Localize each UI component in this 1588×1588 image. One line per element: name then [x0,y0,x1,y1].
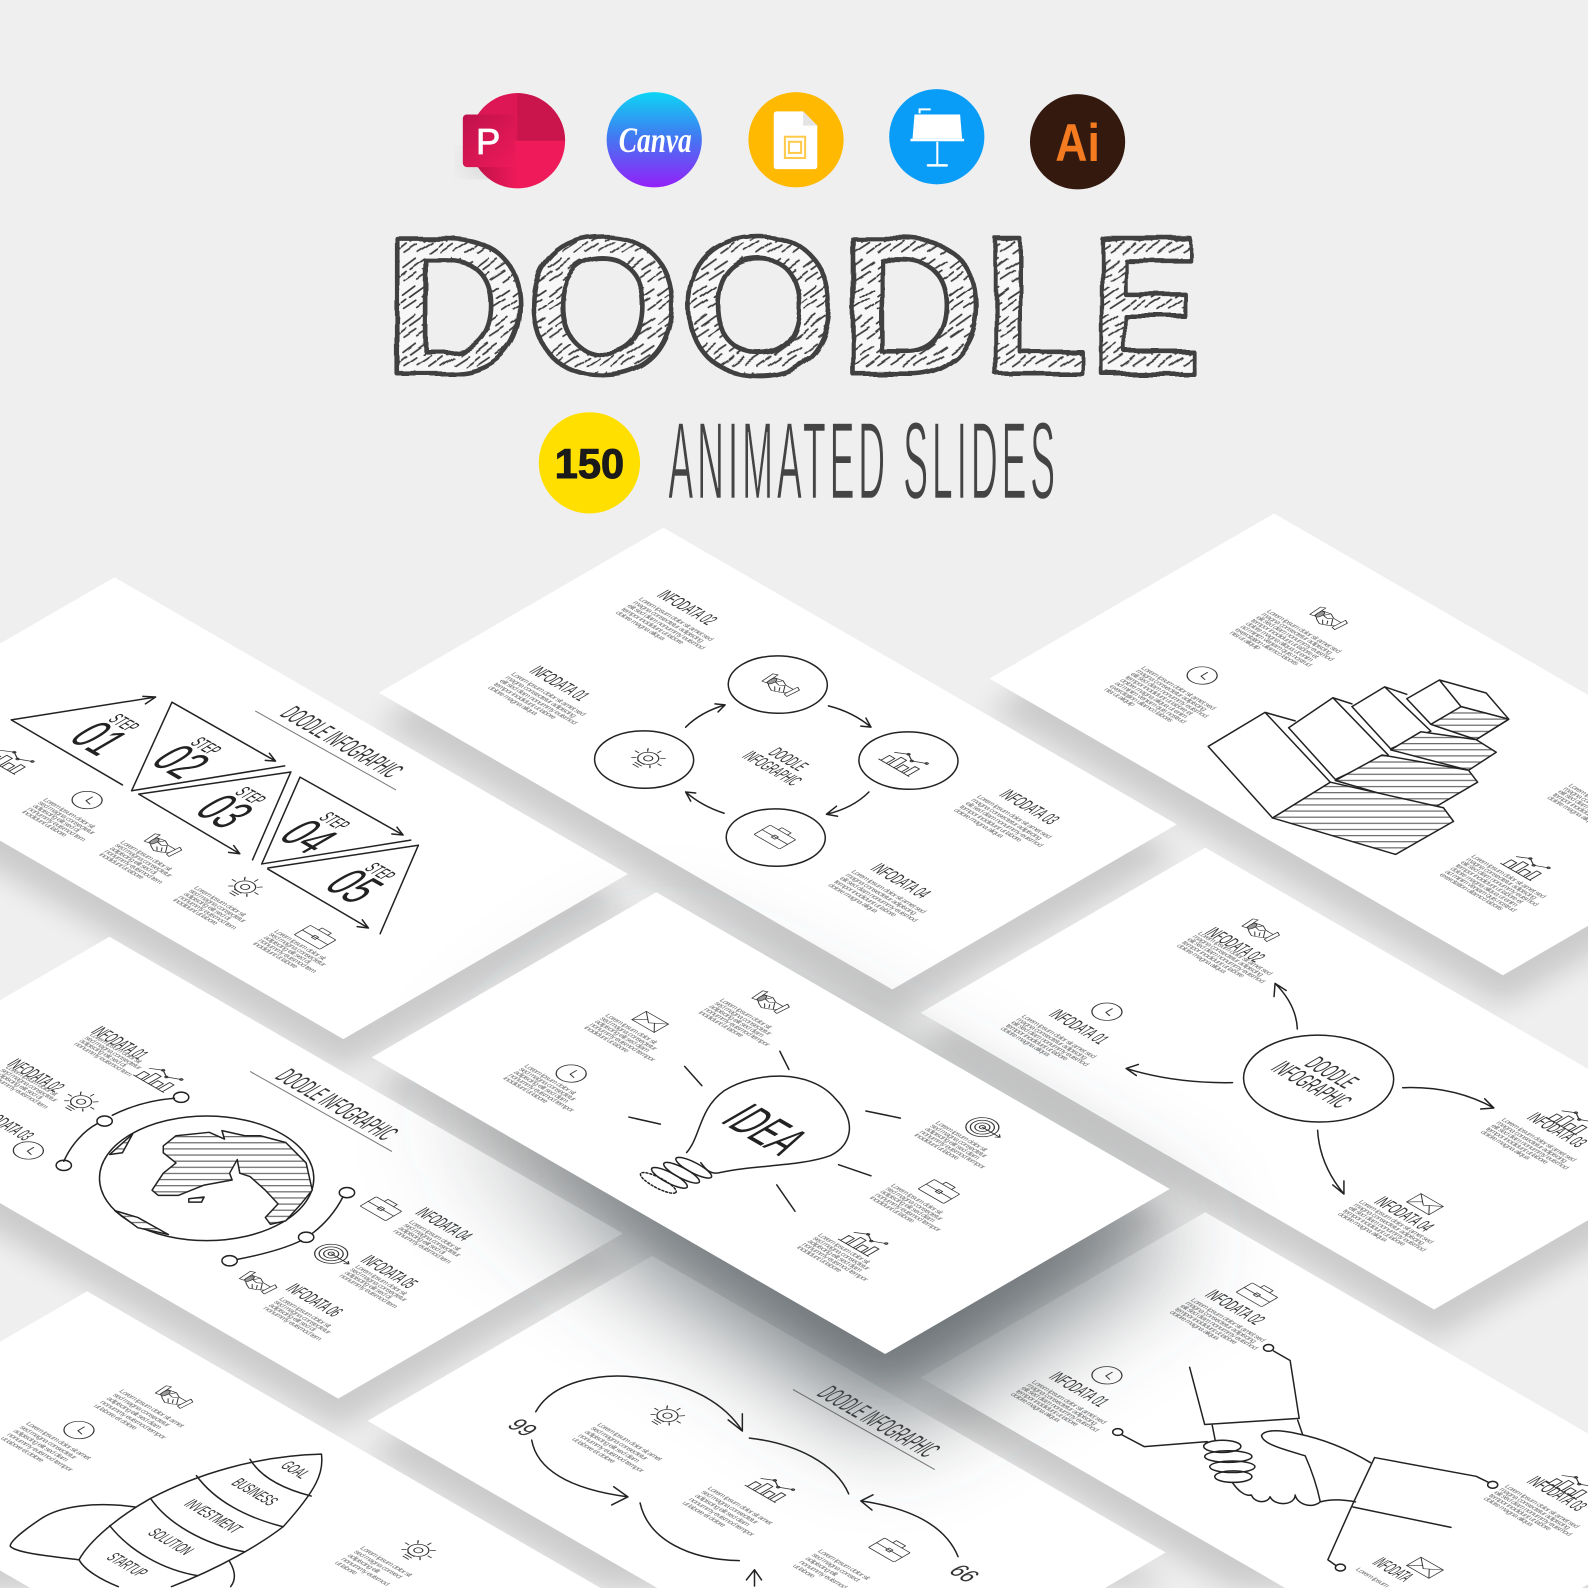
step labels: 01 [57,714,142,763]
heavy shadow of center slide [372,933,1190,1430]
text block: nonummy euismod tempor [800,1241,871,1283]
text block: dolore magna aliqua [826,882,882,914]
text block: magna consectetur adipiscing [843,872,920,916]
step labels: 05 [312,861,397,911]
panel: loop slide [368,1256,1166,1588]
cycle center label: INFOGRAPHIC [737,749,807,789]
icon: bulb [56,1087,107,1116]
text block: adipiscing elit sed diam [707,1003,767,1038]
title: DOODLE [384,196,1200,416]
rocket labels [102,1458,315,1580]
text block: adipiscing elit sed di [342,1270,395,1300]
hub label [1264,1053,1366,1112]
rocket labels: GOAL [276,1458,315,1481]
text block: exercitation ullamco laboris [1107,683,1176,723]
text block: sed magna consectetur [266,931,329,968]
stacked cube diagram [1208,680,1509,854]
text block: ut labore [333,1560,360,1576]
icon: Canva [607,92,702,187]
rocket labels: SOLUTION [143,1525,199,1557]
title: DOODLE: O [526,196,681,416]
text block: Lorem ipsum dolor sit amet sed [1139,665,1219,711]
panel: rocket slide [0,1291,601,1588]
text block: ut labore et dolore [680,1500,729,1528]
text block: tempor incididunt ut labore et [1248,617,1322,660]
icon: Canva: Canva [619,120,692,160]
text block: adipiscing elit sed di [261,934,314,965]
icon: clock [1086,1363,1128,1388]
text block: nisi ut aliquip [1227,630,1264,651]
text block: nonummy euismod tempor [873,1192,944,1233]
text block: sed magna consectetur [712,1000,775,1037]
text block: Lorem ipsum dolor sit amet [705,1485,775,1526]
text block: ad minim veniam quis nostrud [1112,680,1189,725]
text block: nonummy euismod tem [256,937,320,974]
text block: magna consectetur adipiscing [1351,1202,1428,1246]
text block: tempor incididunt ut labore [1483,1126,1551,1165]
text block: nonummy euismod tempor [686,1496,758,1538]
text block: Lorem ipsum dolor sit [87,1032,145,1065]
icon: clock [7,1138,50,1163]
text block: sed magna consectetur [517,1066,580,1102]
text block: tempor incididunt ut labore [1003,1022,1071,1062]
heading: INFODATA 02 [1199,925,1270,965]
text block: adipiscing elit sed diam [582,1429,642,1464]
text block: incididunt ut labore [582,1025,632,1054]
panel: loop slide: DOODLE INFOGRAPHIC [810,1382,947,1462]
text block: Lorem ipsum dolor sit amet [117,1388,187,1429]
text block: Lorem ipsum dolor sit amet sed [1195,930,1275,976]
heading: INFODATA 02 [2,1056,69,1095]
text block: magna consectetur adipiscing [503,674,579,719]
icon: clock [1181,663,1223,688]
text block: elit sed diam nonummy euismod [963,800,1046,848]
icon: mail [1407,1557,1443,1578]
text block: Lorem ipsum dolor sit amet sed [1356,1199,1436,1245]
text block: Lorem ipsum dolor sit amet sed [1019,1013,1099,1060]
icon: mail [632,1011,668,1032]
panel: triangle steps slide: DOODLE INFOGRAPHIC [273,703,410,782]
icon: briefcase [360,1195,405,1221]
text block: dolore magna aliqua [1008,1391,1064,1424]
step labels: STEP [314,809,355,833]
text block: Lorem ipsum dolor sit [272,928,329,961]
text block: incididunt ut labore [171,897,221,926]
text block: incididunt ut labore [20,809,70,838]
text block: incididunt ut labore [696,1009,747,1038]
heading: INFODATA 02 [1199,1287,1270,1328]
app icons row [463,89,1125,189]
text block: elit sed diam nonummy euismod [1019,1385,1102,1433]
text block: dolore magna aliqua [998,1026,1054,1058]
icon: chart [745,1473,796,1503]
step labels [57,711,400,911]
icon: chart [838,1227,889,1256]
text block: elit sed diam nonummy euismod [497,678,580,726]
text block: elit sed diam nonummy euismod [1254,614,1337,662]
icon: briefcase [294,923,339,949]
text block: Lorem ipsum dolor sit amet sed [1502,1483,1582,1529]
heading: INFODATA 04 [1369,1194,1439,1235]
text block: dolore magna aliqua [1335,1211,1391,1243]
handshake diagram [1113,1344,1498,1571]
text block: sed magna consect [809,1552,863,1583]
text block: elit sed diam nonummy euismod [625,603,708,651]
text block: Lorem ipsum dolor sit [277,1296,334,1329]
heading: INFODATA 04 [410,1205,477,1244]
text block: magna consectetur adipiscing [1133,668,1210,712]
icon: Keynote [889,89,984,184]
text block: adipiscing elit sed di [107,845,160,876]
text block: adipiscing elit sed diam [11,1428,71,1463]
icon: Illustrator [1030,94,1125,189]
text block: dolore magna aliqua ut enim [1243,620,1316,663]
text block: nonummy euismod tem [391,1228,454,1265]
text block: ad minim veniam quis nostrud [1442,869,1519,913]
text block: adipiscing elit [345,1552,383,1574]
text block: sed magna consect [351,1549,405,1580]
text block: sed magna consectetur [82,1035,145,1071]
text block: magna consectetur adipiscing [1014,1016,1090,1061]
step labels: 02 [139,737,224,786]
panel: globe slide: DOODLE INFOGRAPHIC [268,1065,405,1145]
subtitle: ANIMATED SLIDES [668,401,1055,522]
heading: INFODATA 01 [1043,1369,1114,1410]
icon: briefcase [869,1536,914,1562]
text block: incididunt ut labore [795,1244,845,1273]
text block: nonummy euismod tem [337,1273,401,1309]
step labels: STEP [185,734,226,758]
text block: incididunt ut labore [867,1195,918,1224]
cycle numbers: 66 [502,1415,545,1439]
icon: clock [550,1061,592,1086]
icon: clock [66,788,108,812]
text block: dolore magna aliqua [486,684,542,717]
icon: Illustrator: Ai [1055,114,1100,173]
text block: ut labore et dolore [91,1403,140,1431]
icon: bulb [393,1536,444,1565]
text block: nonummy euismod tempor [98,1399,169,1440]
icon: clock [1086,999,1128,1024]
hub diagram [1126,983,1494,1194]
text block: Lorem ipsum dolor sit amet sed [1188,1297,1268,1343]
text block: sed magna consectetur [598,1015,661,1052]
icon: handshake [758,673,802,698]
step labels: 04 [266,812,351,861]
text block: Lorem ipsum dolor sit [816,1232,873,1265]
text block: incididunt ut labore [251,940,301,970]
text block: exercitation ullamco laboris [1233,627,1302,667]
soft slide shadows [0,544,1588,1588]
text block: ut labore [790,1563,818,1579]
text block: tempor incididunt ut labore [1341,1208,1408,1247]
icon: briefcase [754,823,799,849]
text block: Lorem ipsum dolor sit [353,1263,410,1296]
title: DOODLE: D [840,196,984,416]
text block: incididunt ut labore [912,1132,962,1161]
text block: tempor incididunt ut labore [1172,1306,1240,1345]
icon: handshake [151,1385,195,1410]
text block: dolore magna aliqua [1167,1309,1223,1341]
text block: Lorem ipsum dolor sit amet sed [975,794,1055,840]
text block: tempor incididunt ut labore et [1453,862,1526,905]
bulb diagram [629,1051,900,1211]
icon: bulb [220,872,271,902]
icon: mail [1407,1194,1443,1215]
text block: sed magna consectetur [810,1235,873,1272]
step labels: STEP [359,860,400,884]
text block: Lorem ipsum dolor sit [406,1219,464,1252]
heading: INFODATA 03 [994,787,1064,828]
text block: Lorem ipsum dolor sit amet [595,1421,665,1462]
text block: adipiscing elit sed diam [104,1395,164,1430]
panel: idea bulb slide [372,892,1170,1354]
heading: INFODATA 06 [280,1281,347,1320]
text block: Lorem ipsum dolor sit [888,1182,946,1215]
text block: tempor incididunt ut labore [619,606,687,645]
text block: elit sed diam nonummy euismod [837,875,920,923]
hub label: DOODLE [1298,1053,1366,1092]
cycle diagram [574,644,978,878]
text block: adipiscing elit [803,1555,841,1577]
text block: sed magna consectetur [36,800,99,836]
heading: INFODATA 04 [865,861,935,901]
text block: adipiscing elit sed di [266,1302,319,1333]
text block: dolore magna aliqua [1174,943,1230,975]
text block: Lorem ipsum dolor sit [358,1545,415,1578]
text block: sed magna consectetur [186,888,249,924]
text block: Lorem ipsum dolor sit [816,1548,873,1581]
text block: sed magna consectetur [272,1299,335,1335]
step labels: STEP [103,711,144,735]
text block: Lorem ipsum dolor sit amet sed [1029,1379,1109,1425]
text block: incididunt ut labore [501,1075,551,1104]
cycle numbers [502,1415,986,1585]
text block: Lorem ipsum dolor sit amet [24,1420,94,1461]
text block: sed magna consectetur [113,842,176,879]
icon: chart [879,747,930,776]
text block: elit sed diam nonummy euismod [1489,1123,1572,1171]
text block: Lorem ipsum dolor sit amet sed [1264,608,1344,654]
title: DOODLE: D [384,196,529,416]
rocket labels: BUSINESS [227,1475,283,1508]
title: DOODLE: L [984,196,1088,416]
icon: Google Slides [748,92,844,187]
text block: tempor incididunt ut labore [491,681,559,720]
text block: exercitation ullamco laboris [1437,872,1507,912]
icon: chart [0,745,36,774]
text block: magna consectetur adipiscing [1190,933,1267,978]
panel: triangle steps slide [0,577,628,1039]
badge: 150 [539,412,640,513]
title: DOODLE: E [1091,196,1200,416]
panel: hub slide [921,848,1588,1309]
text block: adipiscing elit sed diam [923,1126,983,1161]
text block: magna consectetur adipiscing [1259,611,1335,655]
text block: nonummy euismod tempor [587,1021,659,1063]
text block: nonummy euismod tem [72,1041,135,1077]
icon: bulb [642,1401,693,1430]
text block: dolore magna aliqua [613,610,669,642]
text block: sed magna consectetur [347,1267,410,1303]
heading: INFODATA 01 [1043,1007,1114,1047]
text block: dolore magna aliqua [1478,1129,1534,1161]
text block: Lorem ipsum dolor sit amet sed [509,671,589,717]
bulb label: IDEA [709,1096,823,1162]
icon: target [308,1240,360,1271]
text block: elit sed diam nonummy euismod [1009,1019,1092,1067]
text block: Lorem ipsum dolor sit [192,885,249,918]
heading: INFODATA 02 [652,587,722,628]
text block: elit sed diam nonummy euismod [1128,671,1211,719]
text block: dolore magna aliqua ut enim [1118,677,1191,719]
text block: nonummy euismod tem [25,806,89,843]
panel: globe slide [0,937,623,1399]
icon: target [959,1114,1012,1144]
text block: adipiscing elit sed di [181,891,234,921]
text block: sed magna consectetur [401,1222,464,1258]
triangle step diagram [11,696,418,934]
loop arrows [532,1376,958,1586]
icon: chart [1546,1470,1588,1499]
text block: Lorem ipsum dolor sit [41,797,98,830]
cycle numbers: 99 [944,1561,986,1585]
text block: ad minim veniam quis nostrud [1238,624,1315,668]
icon: PowerPoint: P [476,121,500,162]
text block: Lorem ipsum dolor sit [933,1120,990,1153]
icon: bulb [623,744,674,773]
text block: nonummy euismod tem [102,848,166,885]
text block: ut labore et dolore [570,1436,618,1464]
panel: hub slide: INFOGRAPHIC [1264,1057,1359,1112]
text block: Lorem ipsum dolor sit [118,839,175,872]
text block: nonummy euismod tempor [702,1006,773,1048]
text block: adipiscing elit sed diam [878,1189,938,1223]
text block: Lorem ipsum dolor sit amet sed [1469,853,1549,899]
text block: dolore magna aliqua [951,807,1007,839]
icon: clock [58,1418,100,1442]
panel: handshake slide [921,1212,1588,1588]
panel: cycle slide [379,528,1177,989]
text block: tempor incididunt ut labore [832,879,899,918]
text block: elit sed diam nonummy euismod [1185,936,1268,984]
rocket diagram [10,1454,322,1587]
text block: Lorem ipsum dolor sit [3,1064,60,1097]
text block: nonummy euismod tem [261,1305,325,1342]
text block: Lorem ipsum dolor sit [603,1012,660,1045]
text block: magna consectetur adipiscing [1497,1486,1573,1530]
text block: elit sed diam nonummy euismod [1346,1205,1429,1253]
step labels: 03 [182,787,267,836]
text block: tempor incididunt ut labore [1180,939,1247,979]
badge: 150: 150 [555,440,624,487]
icon: handshake [1306,606,1350,632]
heading: INFODATA 01 [524,663,594,704]
text block: magna consectetur adipiscing [631,599,707,644]
step labels: STEP [230,784,271,808]
text block: magna consectetur adipiscing [1494,1120,1570,1164]
title: DOODLE: O [681,196,838,416]
text block: adipiscing elit sed diam [511,1069,572,1104]
text block: Lorem ipsum dolor sit amet sed [636,596,716,642]
text block: adipiscing elit sed di [30,803,83,833]
text block: elit sed diam nonummy euismod [1492,1489,1575,1537]
text block: tempor incididunt ut labore [957,804,1025,843]
text block: adipiscing elit sed diam [805,1238,865,1273]
text block: Lorem ipsum [1353,1566,1392,1588]
text block: incididunt ut labore [97,851,147,880]
text block: elit sed diam nonummy euismod [1178,1303,1261,1351]
text block: tempor incididunt ut labore [1013,1388,1081,1427]
text block: dolore magna aliqua [1481,1495,1537,1528]
text block: nonummy euismod tem [176,894,240,931]
text block: sed magna consectetur [588,1425,651,1462]
text block: Lorem ipsum dolor sit [717,997,774,1030]
text block: magna consectetur adipiscing [1464,856,1540,901]
text block: nonummy euismod tempor [576,1432,647,1474]
text block: elit sed diam nonummy euismod [1458,859,1541,907]
globe map [56,1092,355,1266]
text block: magna consectetur adipiscing [1183,1300,1259,1344]
text block: adipiscing elit sed di [396,1225,449,1256]
text block: tempor incididunt ut labore [1486,1492,1554,1532]
cycle center label: DOODLE [763,745,813,774]
rocket labels: INVESTMENT [180,1496,248,1536]
icon: chart [1501,851,1552,881]
text block: adipiscing elit sed diam [693,1493,753,1527]
text block: Lorem ipsum dolor sit amet sed [849,868,929,915]
icon: handshake [140,833,184,858]
icon: chart [1546,1105,1588,1135]
text block: sed magna consectetur [928,1123,991,1159]
icon: handshake [748,990,792,1015]
text block: magna consectetur adipiscing [1024,1382,1100,1426]
heading: INFODATA 01 [86,1024,153,1063]
icon: handshake [1238,918,1282,944]
text block: tempor incididunt ut labore et [1123,674,1196,716]
text block: sed magna consectetur [17,1424,80,1461]
text block: nonummy euismod tempor [917,1129,989,1170]
cycle center label [737,745,813,789]
text block: nonummy euismod tempor [5,1431,76,1473]
text block: adipiscing elit sed di [77,1038,130,1068]
text block: nonummy euismod [339,1556,392,1587]
icon: PowerPoint [463,93,565,188]
text block: Lorem ipsum dolor sit amet sed [1499,1117,1579,1163]
icon: briefcase [1236,1281,1281,1307]
panel: stacked blocks slide [989,513,1588,975]
text block: dolore magna aliqua ut enim [1448,866,1521,908]
text block: sed magna consectetur [110,1392,173,1428]
icon: briefcase [918,1177,963,1204]
text block: nonummy euismod tempor [506,1072,578,1114]
text block: magna consectetur adipiscing [969,797,1045,841]
text block: nisi ut aliquip [1102,686,1138,707]
icon: chart [133,1063,185,1092]
heading: INFODATA 05 [355,1253,422,1291]
text block: adipiscing elit sed diam [592,1018,653,1053]
text block: sed magna consectetur [883,1186,946,1222]
text block: sed magna consectetur [699,1489,762,1525]
text block: Lorem ipsum dolor sit [522,1063,579,1096]
icon: handshake [235,1270,279,1296]
